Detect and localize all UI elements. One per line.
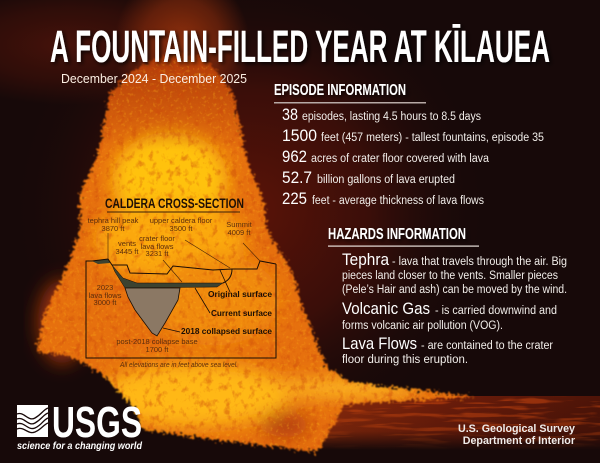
hazard: tephra — [342, 250, 567, 296]
labels: tephra hill peak — [88, 216, 139, 225]
heading: hazards information: HAZARDS INFORMATION — [328, 226, 466, 243]
surface profiles — [92, 259, 276, 274]
labels: 4009 ft — [228, 228, 251, 237]
stat: acres: acres of crater floor covered with lava — [311, 153, 490, 165]
collapse fill — [125, 288, 180, 336]
panel: caldera cross-section — [86, 195, 276, 369]
surface labels: 2018 collapsed surface — [181, 326, 272, 336]
heading: episode information: EPISODE INFORMATION — [274, 82, 406, 99]
stat: thickness — [282, 189, 484, 208]
hazard: volcanic gas: - is carried downwind and — [435, 305, 557, 317]
stat: fountains: feet (457 meters) - tallest fountains, episode 35 — [321, 132, 544, 144]
panel: hazards information — [328, 226, 567, 366]
stat: gallons: 52.7 — [282, 168, 312, 187]
heading: caldera cross-section: CALDERA CROSS-SECTION — [105, 195, 244, 211]
lava flow foreground — [280, 396, 600, 450]
stat: episodes: episodes, lasting 4.5 hours to 8.5 days — [302, 111, 481, 123]
labels: 3870 ft — [102, 224, 125, 233]
agency credit: Department of Interior — [463, 435, 575, 447]
labels: 3000 ft — [94, 298, 117, 307]
USGS wordmark: USGS — [52, 398, 142, 447]
stat: episodes: 38 — [282, 105, 298, 124]
hazard: volcanic gas: forms volcanic air pollution (VOG). — [342, 320, 503, 332]
plume top — [114, 0, 250, 120]
labels: 3500 ft — [170, 224, 193, 233]
USGS logo — [17, 398, 143, 452]
hazard: lava flows — [342, 334, 553, 366]
stat: thickness: feet - average thickness of lava flows — [312, 195, 484, 207]
agency credit: U.S. Geological Survey — [458, 423, 575, 435]
stat: acres — [282, 147, 490, 166]
hazard: tephra: pieces land closer to the vents. Smaller pieces — [342, 270, 558, 282]
labels: lava flows — [89, 291, 122, 300]
labels — [88, 216, 253, 354]
hazard: tephra: Tephra — [342, 250, 389, 269]
current lava layer — [112, 265, 223, 288]
date range: December 2024 - December 2025 — [61, 72, 247, 86]
stat: thickness: 225 — [282, 189, 307, 208]
tephra lava cap — [92, 259, 110, 264]
hazard: volcanic gas — [342, 299, 557, 332]
stat: episodes — [282, 105, 481, 124]
tagline: science for a changing world — [17, 440, 143, 452]
hazard: lava flows: floor during this eruption. — [342, 354, 468, 366]
elevation note: All elevations are in feet above sea level. — [119, 360, 238, 369]
diagram frame — [86, 261, 276, 358]
labels: crater floor — [139, 234, 175, 243]
hazard: lava flows: Lava Flows — [342, 334, 417, 353]
labels: vents — [118, 239, 136, 248]
panel: episode information — [274, 82, 544, 208]
hazard: tephra: - lava that travels through the air. Big — [392, 256, 567, 268]
labels: Summit — [226, 220, 253, 229]
icon: USGS wave square — [17, 405, 48, 437]
surface labels: Current surface — [211, 308, 272, 318]
leader lines — [108, 233, 260, 282]
smoke haze upper left — [0, 0, 220, 105]
hazard: lava flows: - are contained to the crater — [421, 340, 553, 352]
labels: upper caldera floor — [150, 216, 213, 225]
labels: 3231 ft — [146, 249, 169, 258]
labels: 1700 ft — [146, 345, 169, 354]
stat: fountains: 1500 — [282, 126, 317, 145]
stat: fountains — [282, 126, 544, 145]
surface labels: Original surface — [208, 289, 272, 299]
stat: gallons: billion gallons of lava erupted — [317, 174, 455, 186]
fountain halo left — [38, 280, 86, 364]
stat: gallons — [282, 168, 455, 187]
labels: 2023 — [97, 283, 113, 292]
labels: post-2018 collapse base — [116, 337, 198, 346]
surface labels — [181, 289, 272, 336]
pointer lines — [163, 270, 230, 332]
labels: 3445 ft — [116, 247, 139, 256]
hazard: tephra: (Pele’s Hair and ash) can be moved by the wind. — [342, 284, 567, 296]
labels: lava flows — [141, 242, 174, 251]
agency credit — [458, 423, 575, 447]
hazard: volcanic gas: Volcanic Gas — [342, 299, 430, 318]
original surface line — [223, 269, 232, 283]
lava fountain — [34, 52, 474, 457]
stat: acres: 962 — [282, 147, 307, 166]
